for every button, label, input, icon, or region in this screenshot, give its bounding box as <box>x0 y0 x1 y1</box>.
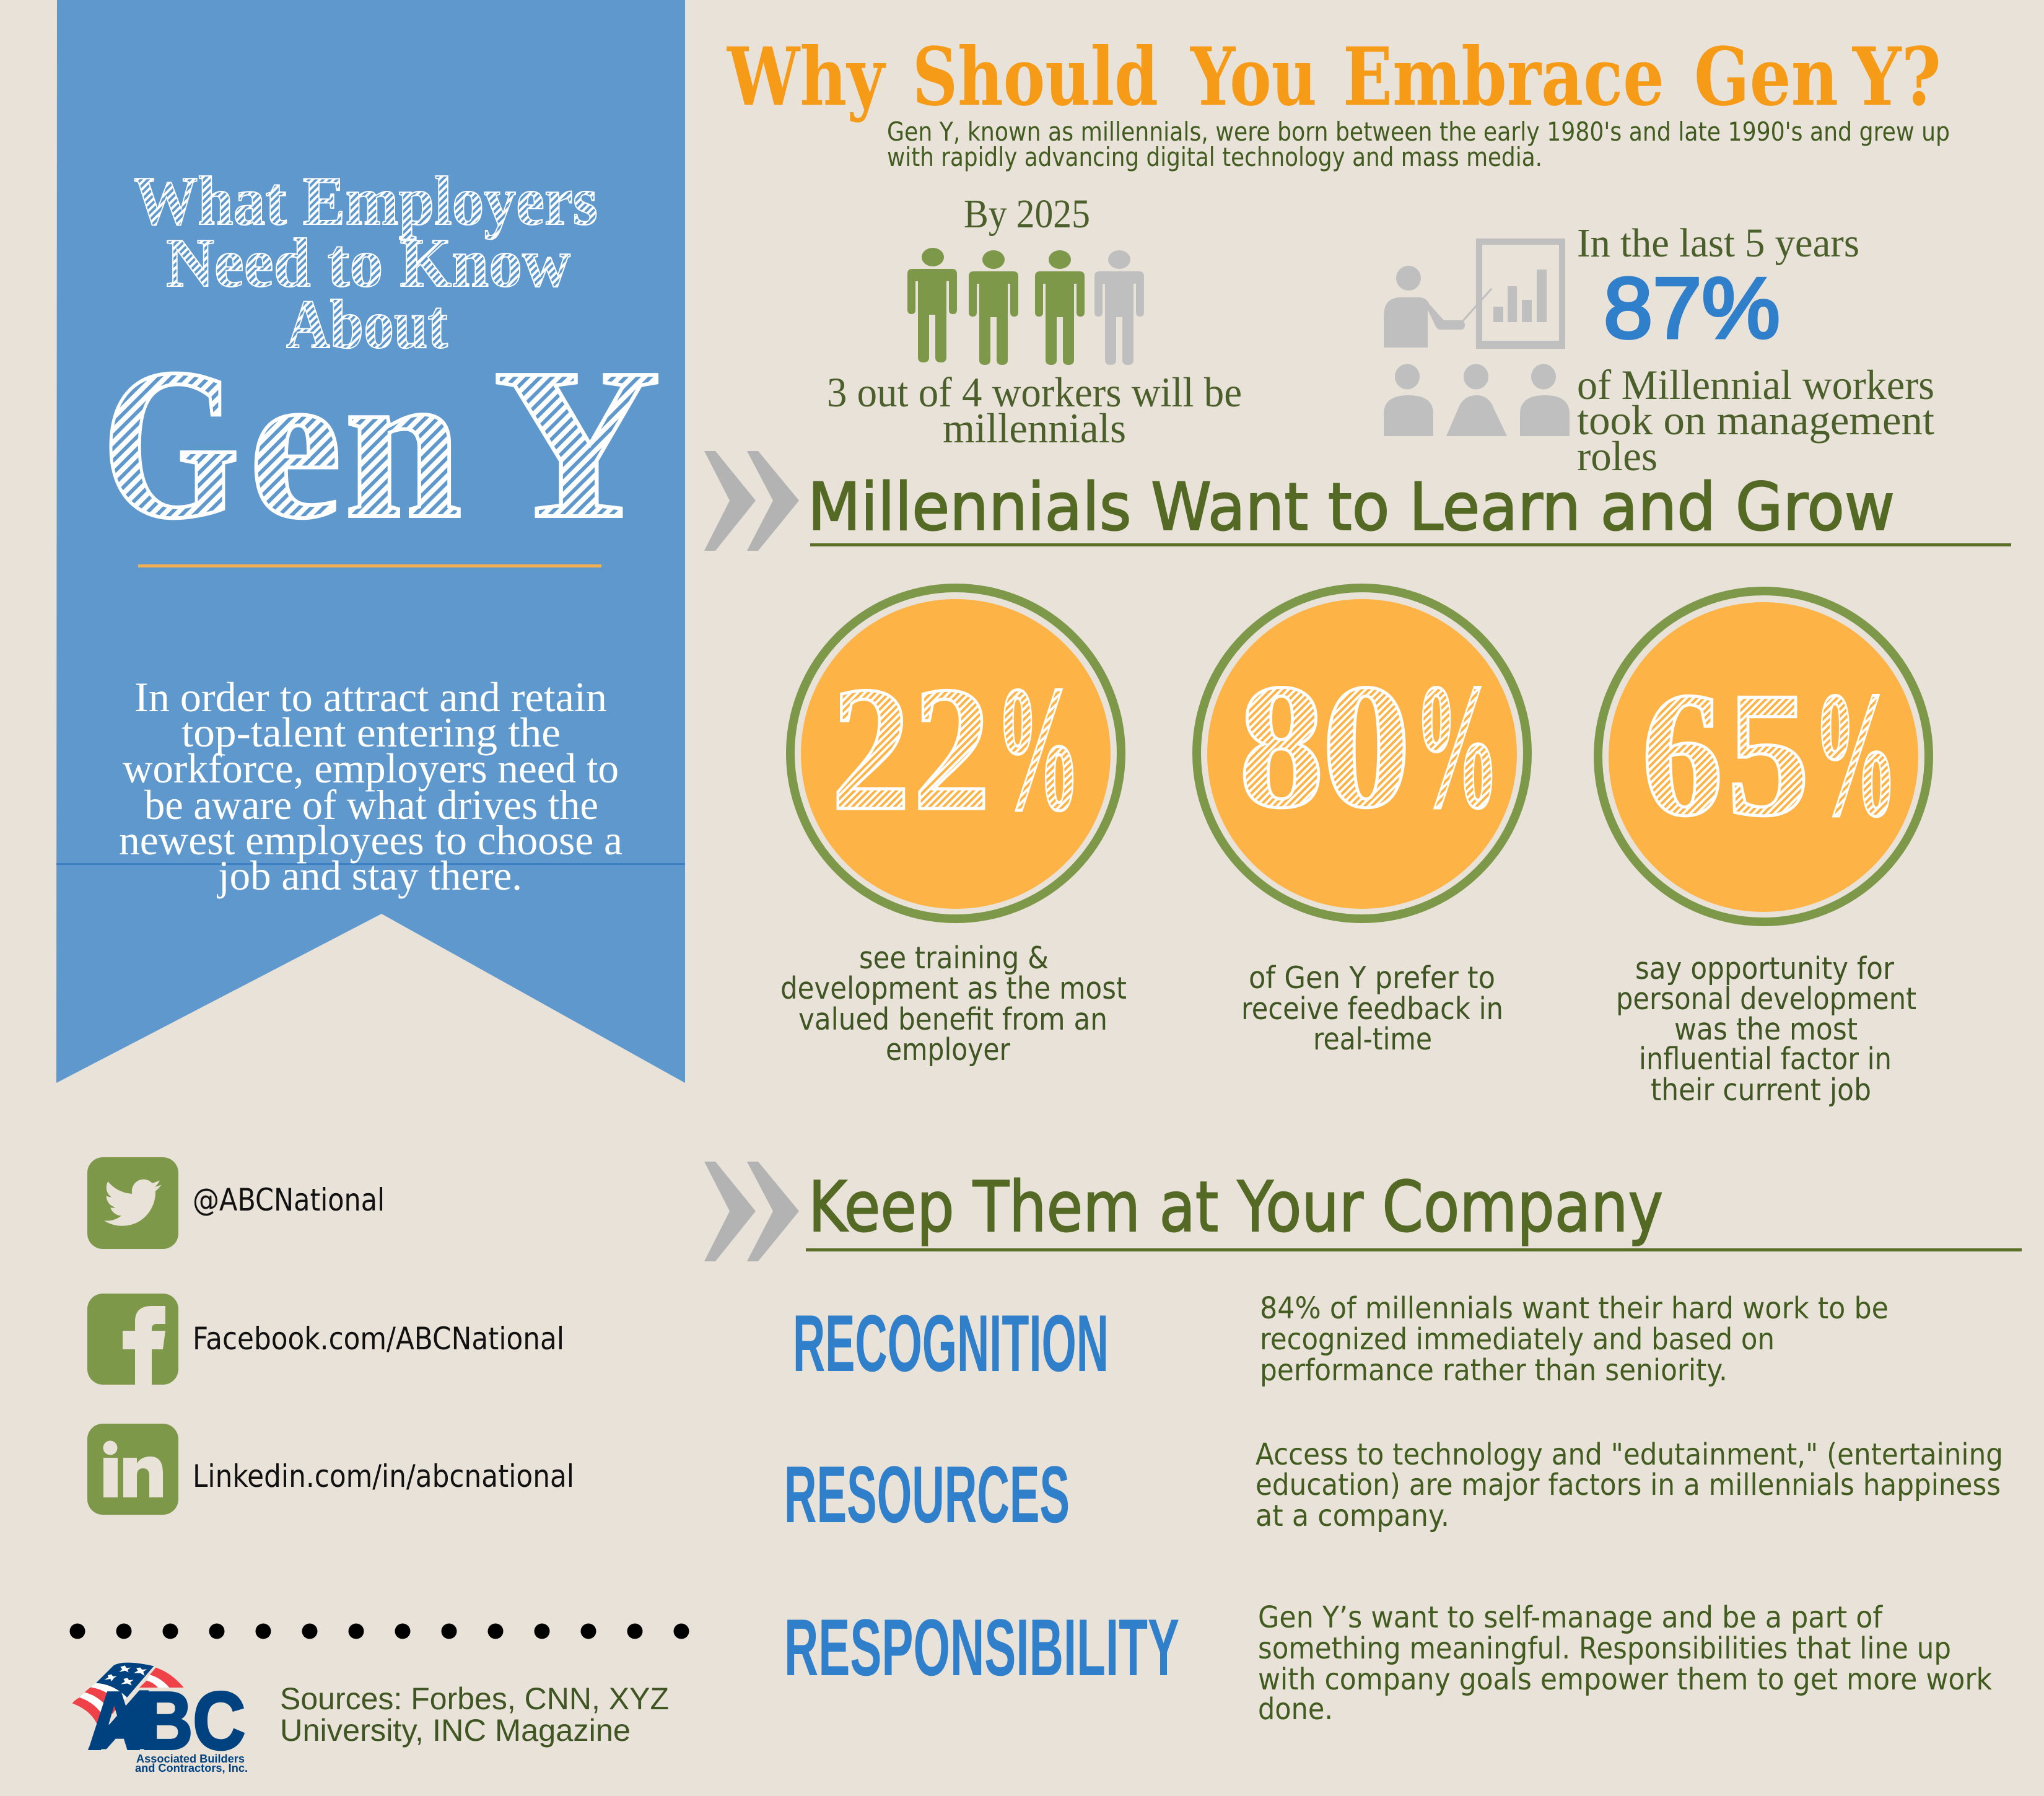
title: why should you embrace gen y: Why <box>726 30 886 124</box>
chart: 80 percent circle: 8 <box>1239 647 1324 845</box>
text: of millennial workers: roles <box>1577 432 1657 480</box>
number: 87%: 87% <box>1604 260 1780 356</box>
text: 80 percent caption: receive feedback in <box>1241 991 1503 1027</box>
panel: 80 percent stat <box>1197 588 1527 1057</box>
icon: facebook <box>87 1294 178 1385</box>
text: facebook url: Facebook.com/ABCNational <box>193 1321 564 1357</box>
title: why should you embrace gen y: Should <box>912 30 1158 124</box>
text: in the last 5 years: In the last 5 years <box>1577 221 1859 266</box>
text: of millennial workers: of Millennial workers <box>1577 361 1934 408</box>
text: 3 out of 4 workers: 3 out of 4 workers will be <box>827 369 1242 416</box>
text: linkedin url: Linkedin.com/in/abcnational <box>193 1458 574 1494</box>
heading: Gen Y: e <box>249 325 342 563</box>
panel: 22 percent stat <box>780 588 1127 1067</box>
chart: 65 percent circle: % <box>1813 655 1898 853</box>
text: recognition description: 84% of millennials want their hard work to be <box>1260 1291 1889 1326</box>
text: ribbon paragraph <box>119 673 622 899</box>
text: intro description: with rapidly advancing digital technology and mass media. <box>887 142 1542 172</box>
text: 65 percent caption: their current job <box>1651 1072 1871 1108</box>
panel: social links <box>87 1157 574 1515</box>
text: intro description <box>887 116 1950 172</box>
title: why should you embrace gen y: Embrace <box>1343 30 1664 124</box>
heading: what employers need to know about <box>134 163 598 363</box>
text: responsibility description: Gen Y’s want to self-manage and be a part of <box>1258 1600 1883 1635</box>
panel: blue ribbon banner <box>56 0 685 1083</box>
text: recognition description: recognized immediately and based on <box>1260 1322 1775 1357</box>
icon: twitter <box>87 1157 178 1249</box>
text: 65 percent caption: personal development <box>1616 981 1916 1017</box>
chart: 22 percent circle <box>790 588 1121 919</box>
heading: Gen Y: n <box>344 325 462 563</box>
text: 65 percent caption <box>1616 951 1916 1108</box>
text: 65 percent caption: say opportunity for <box>1635 951 1895 986</box>
icon: four workers <box>907 248 1144 365</box>
heading: Gen Y: G <box>102 325 240 563</box>
text: responsibility description: something meaningful. Responsibilities that line up <box>1258 1631 1951 1666</box>
text: ribbon paragraph: be aware of what drives the <box>144 781 598 828</box>
icon: presenter and audience <box>1384 239 1570 436</box>
heading: millennials want to learn and grow: Millennials Want to Learn and Grow <box>808 469 1895 545</box>
logo: ABC: Associated Builders <box>136 1753 245 1765</box>
text: 80 percent caption <box>1241 960 1503 1057</box>
text: sources: Sources: Forbes, CNN, XYZ <box>280 1681 669 1716</box>
chart: 65 percent circle: 5 <box>1727 655 1810 853</box>
title: why should you embrace gen y <box>726 30 1941 124</box>
text: 65 percent caption: influential factor in <box>1639 1041 1892 1077</box>
text: responsibility description: with company goals empower them to get more work <box>1258 1662 1992 1697</box>
text: 80 percent caption: of Gen Y prefer to <box>1249 960 1495 996</box>
chart: 80 percent circle: 0 <box>1322 647 1411 845</box>
logo: ABC <box>72 1663 248 1774</box>
chart: 22 percent circle: 2 <box>831 650 911 848</box>
chart: 80 percent circle: % <box>1414 647 1500 845</box>
heading: what employers need to know about: What Employers <box>134 163 598 240</box>
text: recognition description <box>1260 1291 1889 1388</box>
text: 22 percent caption <box>780 940 1127 1067</box>
label: resources: RESOURCES <box>784 1449 1070 1540</box>
title: why should you embrace gen y: Y? <box>1851 30 1941 124</box>
chart: 65 percent circle: 6 <box>1641 655 1723 853</box>
text: sources: University, INC Magazine <box>280 1713 631 1748</box>
text: responsibility description: done. <box>1258 1692 1333 1727</box>
heading: what employers need to know about: About <box>286 286 448 363</box>
icon: linkedin <box>87 1424 178 1515</box>
panel: responsibility <box>784 1600 1992 1727</box>
text: 22 percent caption: employer <box>886 1032 1011 1067</box>
chart: 65 percent circle <box>1598 591 1929 922</box>
title: why should you embrace gen y: Gen <box>1694 30 1838 124</box>
chart: 22 percent circle: % <box>995 650 1081 848</box>
text: resources description <box>1256 1437 2003 1533</box>
chart: 22 percent circle: 2 <box>913 650 990 848</box>
text: 65 percent caption: was the most <box>1674 1012 1858 1047</box>
text: 22 percent caption: valued benefit from an <box>798 1002 1107 1037</box>
text: 22 percent caption: see training & <box>859 940 1049 976</box>
label: recognition: RECOGNITION <box>793 1298 1109 1388</box>
text: of millennial workers <box>1577 361 1934 480</box>
text: of millennial workers: took on management <box>1577 396 1934 444</box>
panel: resources <box>784 1437 2003 1540</box>
heading: keep them at your company: Keep Them at Your Company <box>808 1167 1663 1248</box>
text: responsibility description <box>1258 1600 1992 1727</box>
chart: 80 percent circle <box>1197 588 1527 919</box>
text: 80 percent caption: real-time <box>1313 1022 1432 1057</box>
title: why should you embrace gen y: You <box>1189 30 1317 124</box>
text: 3 out of 4 workers <box>827 369 1242 452</box>
text: ribbon paragraph: In order to attract and retain <box>134 673 607 721</box>
arrow: section chevrons keep them <box>704 1162 799 1261</box>
heading: Gen Y: Y <box>494 325 661 563</box>
label: responsibility: RESPONSIBILITY <box>784 1602 1179 1693</box>
text: resources description: at a company. <box>1256 1499 1449 1533</box>
text: 3 out of 4 workers: millennials <box>943 405 1126 452</box>
panel: management statistic <box>1384 221 1934 480</box>
heading: Gen Y <box>102 325 661 563</box>
text: sources <box>280 1681 669 1748</box>
text: ribbon paragraph: newest employees to choose a <box>119 817 622 864</box>
orange divider line <box>138 564 601 567</box>
heading: what employers need to know about: Need to Know <box>166 225 570 302</box>
panel: 65 percent stat <box>1598 591 1929 1108</box>
text: recognition description: performance rather than seniority. <box>1260 1353 1727 1388</box>
text: twitter handle: @ABCNational <box>193 1182 385 1218</box>
text: 22 percent caption: development as the most <box>780 971 1127 1006</box>
panel: by 2025 statistic <box>827 191 1242 452</box>
logo: ABC: ABC <box>88 1675 245 1766</box>
text: ribbon paragraph: workforce, employers need to <box>123 745 619 792</box>
arrow: section chevrons learn and grow <box>704 451 799 551</box>
text: ribbon paragraph: top-talent entering the <box>181 709 561 756</box>
text: ribbon paragraph: job and stay there. <box>217 852 522 899</box>
panel: recognition <box>793 1291 1889 1388</box>
text: by 2025: By 2025 <box>964 191 1090 237</box>
logo: ABC: and Contractors, Inc. <box>135 1762 248 1774</box>
